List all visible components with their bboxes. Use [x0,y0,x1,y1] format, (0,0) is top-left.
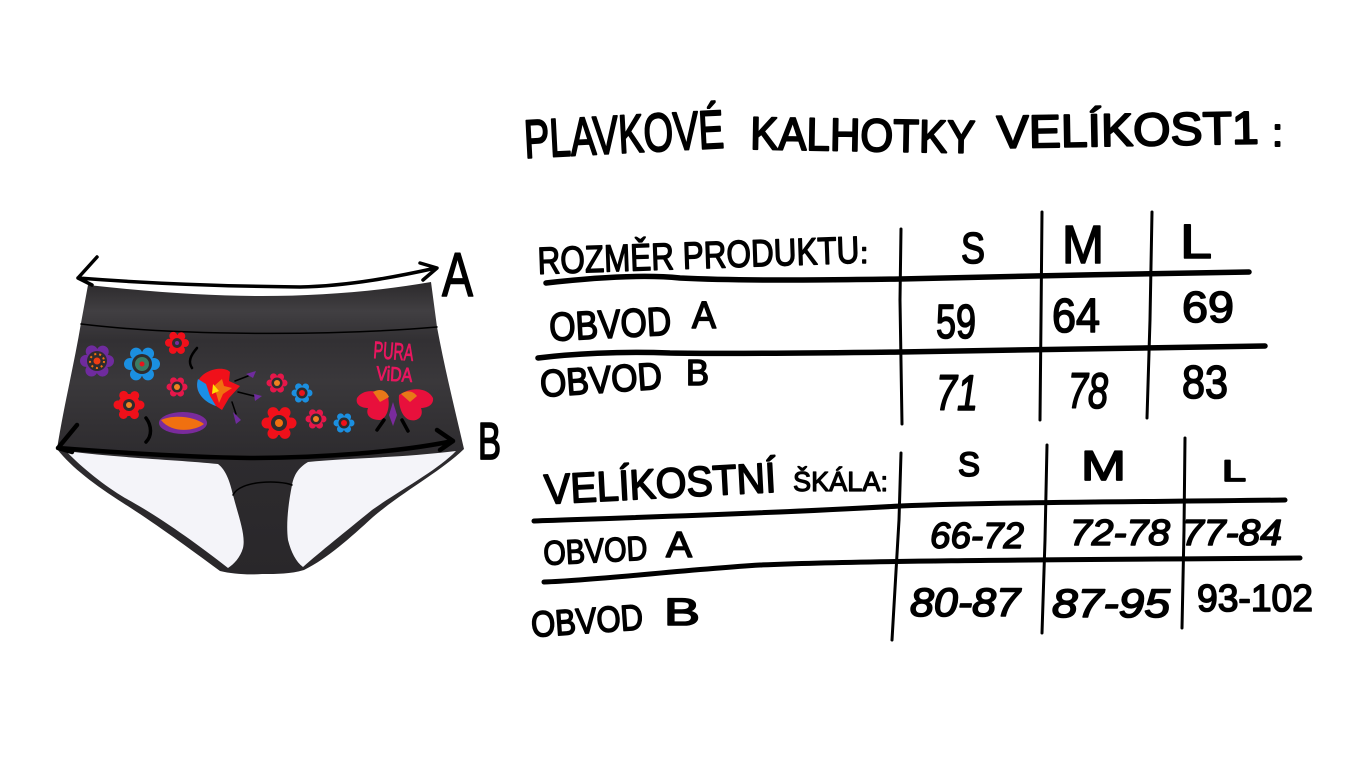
stems of central flower [232,371,262,424]
size L: L [1180,216,1212,269]
label B: B [478,413,501,471]
row label: Obvod B: OBVOD [539,356,663,406]
flower blue 2 [295,386,309,400]
value 59: 59 [936,296,976,349]
row label: Obvod A: A [666,524,692,565]
slogan: PURA VIDA: PURA [373,337,414,367]
value 80-87: 80-87 [910,581,1022,625]
value 78: 78 [1068,363,1108,419]
central flower [197,369,240,410]
row label: Obvod B: OBVOD [530,596,644,645]
product photo: swim briefs [57,282,464,574]
row label: Obvod A: OBVOD [548,300,672,350]
flower blue [130,352,154,376]
row label: Obvod B: B [686,352,709,393]
white lining right [287,451,456,567]
gusset seams [233,482,292,495]
value 93-102: 93-102 [1197,578,1313,620]
leaf motif [159,412,207,434]
value 83: 83 [1182,356,1228,408]
value 87-95: 87-95 [1052,582,1171,626]
flower red top [169,335,185,351]
row header: Rozměr produktu: ROZMĚR PRODUKTU [537,229,860,283]
white lining left [66,451,244,568]
slogan: PURA VIDA [373,337,414,387]
label A: A [442,241,473,310]
size L: L [1222,455,1246,488]
title: : [1272,111,1283,155]
flower red large [267,411,291,435]
title [522,100,1283,170]
row label: Obvod A: A [692,295,717,337]
row label: Obvod A: OBVOD [542,530,648,573]
value 77-84: 77-84 [1182,512,1282,553]
floral print [86,335,433,442]
title: PLAVKOVÉ [522,100,725,170]
value 72-78: 72-78 [1070,512,1170,553]
flower red star [118,394,140,416]
size M: M [1081,442,1126,489]
size S: S [961,224,985,273]
value 69: 69 [1182,283,1234,332]
slogan: PURA VIDA: ViDA [376,363,413,387]
colon: : [860,237,868,270]
flower blue 3 [337,416,351,430]
butterfly [357,389,433,431]
value 71: 71 [936,365,978,421]
flower crimson 3 [309,412,323,426]
table grid [538,212,1265,424]
size S: S [958,446,980,484]
table: product dimensions [537,212,1265,424]
waistband seam [81,324,437,333]
briefs body [57,282,464,574]
size M: M [1062,215,1104,275]
row header: Velikostní škála: VELÍKOSTNÍ [543,454,777,513]
arrow B: hip measurement [58,425,453,458]
arrow A: waist measurement [78,257,437,287]
stem [146,418,150,442]
row label: Obvod B: B [664,592,700,634]
flower crimson [170,380,184,394]
title: KALHOTKY [750,107,976,163]
table grid [534,438,1300,640]
flower purple [86,350,108,372]
flower crimson 2 [270,376,284,390]
table: size scale [530,438,1313,645]
value 64: 64 [1052,290,1100,343]
title: VELÍKOST1 [996,101,1259,158]
value 66-72: 66-72 [930,515,1024,556]
stem [190,348,197,368]
row header: Velikostní škála: ŠKÁLA: [793,466,888,497]
